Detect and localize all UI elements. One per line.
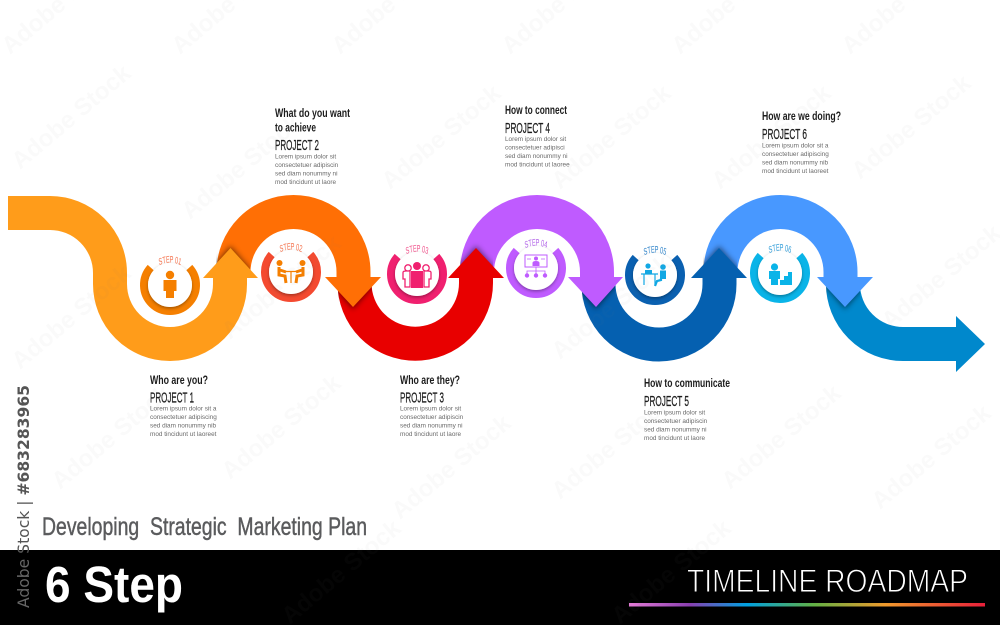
subtitle: Developing Strategic Marketing Plan — [42, 513, 367, 541]
text block: project 6: consectetuer adipiscing — [762, 151, 829, 158]
step 02 badge — [261, 242, 321, 302]
faint watermarks: Adobe Stock — [867, 399, 997, 515]
step 05 badge: STEP 05 — [644, 246, 666, 255]
text block: project 2: PROJECT 2 — [275, 138, 319, 154]
text block: project 6 — [762, 109, 841, 175]
faint watermarks: Adobe Stock — [847, 69, 977, 185]
text block: project 1: Lorem ipsum dolor sit a — [150, 406, 217, 412]
text block: project 6: PROJECT 6 — [762, 127, 807, 143]
text block: project 1: mod tincidunt ut laoreet — [150, 431, 217, 438]
faint watermarks: Adobe Stock — [707, 79, 837, 195]
band: dark blue arc with arrow — [598, 246, 747, 344]
text block: project 5: sed diam nonummy ni — [644, 426, 707, 434]
text block: project 3: Who are they? — [400, 373, 460, 387]
faint watermarks: Adobe Stock — [717, 379, 847, 495]
text block: project 5 — [644, 376, 730, 442]
faint watermarks: Adobe Stock — [377, 79, 507, 195]
band: teal exit arrow — [843, 278, 985, 372]
text block: project 2: What do you want — [275, 106, 350, 120]
icon: group of three — [403, 262, 431, 288]
faint watermarks: Adobe Stock — [217, 369, 347, 485]
band: light blue arc with arrow — [720, 212, 873, 309]
text block: project 2: consectetuer adipiscin — [275, 162, 339, 169]
text block: project 4: consectetuer adipisci — [505, 144, 565, 152]
text block: project 3: Lorem ipsum dolor sit — [400, 406, 461, 412]
text block: project 3: consectetuer adipiscin — [400, 414, 464, 421]
icon: person and stairs — [769, 263, 792, 285]
text block: project 4: How to connect — [505, 103, 567, 117]
title: 6 Step: 6 Step — [45, 556, 183, 613]
icon: two people at a table — [276, 260, 306, 283]
rainbow rule — [629, 603, 985, 606]
text block: project 4: mod tincidunt ut laoree — [505, 162, 570, 168]
icon: two people at a desk — [641, 263, 666, 286]
text block: project 5: Lorem ipsum dolor sit — [644, 410, 705, 416]
text block: project 5: PROJECT 5 — [644, 394, 689, 410]
text block: project 3: PROJECT 3 — [400, 390, 444, 406]
text block: project 2: sed diam nonummy ni — [275, 170, 338, 178]
band: dark orange arc with arrow — [234, 212, 381, 309]
step 06 badge — [750, 244, 810, 303]
faint watermarks: Adobe Stock — [547, 389, 677, 505]
text block: project 3: sed diam nonummy ni — [400, 422, 463, 430]
faint watermarks: Adobe Stock — [217, 229, 347, 345]
step 02 badge: STEP 02 — [280, 242, 302, 252]
icon: presentation screen with tree — [525, 255, 547, 278]
step 01 badge — [140, 256, 200, 315]
title: timeline roadmap: TIMELINE ROADMAP — [687, 563, 968, 599]
faint watermarks: Adobe Stock — [177, 109, 307, 225]
text block: project 2 — [275, 106, 350, 186]
faint watermarks: Adobe Stock — [387, 409, 517, 525]
text block: project 2: mod tincidunt ut laore — [275, 179, 337, 186]
step 05 badge — [625, 246, 685, 305]
footer bar — [0, 550, 1000, 625]
band: red arc with arrow — [354, 246, 504, 344]
band: light orange entry with arrow — [8, 213, 258, 344]
faint watermarks: Adobe Stock — [7, 259, 137, 375]
vertical stock credit: Adobe Stock | #683283965 — [14, 385, 33, 608]
band: purple arc with arrow — [477, 212, 623, 309]
step 04 badge: STEP 04 — [524, 238, 548, 248]
step 06 badge: STEP 06 — [768, 244, 792, 253]
step 01 badge: STEP 01 — [158, 256, 181, 265]
text block: project 2: Lorem ipsum dolor sit — [275, 154, 336, 160]
text block: project 1 — [150, 373, 217, 438]
text block: project 1: sed diam nonummy nib — [150, 422, 217, 430]
faint watermarks: Adobe Stock — [47, 379, 177, 495]
text block: project 5: consectetuer adipiscin — [644, 418, 708, 425]
text block: project 4 — [505, 103, 570, 168]
text block: project 2: to achieve — [275, 120, 316, 134]
text block: project 1: consectetuer adipiscing — [150, 414, 217, 421]
faint watermarks: Adobe Stock — [547, 79, 677, 195]
faint watermarks: Adobe Stock — [7, 59, 137, 175]
faint watermarks: Adobe Stock — [547, 249, 677, 365]
text block: project 1: PROJECT 1 — [150, 390, 194, 406]
step 04 badge — [506, 238, 566, 298]
text block: project 1: Who are you? — [150, 373, 208, 387]
step 03 badge — [387, 244, 447, 304]
text block: project 3: mod tincidunt ut laore — [400, 431, 462, 438]
text block: project 4: sed diam nonummy ni — [505, 153, 568, 160]
text block: project 4: Lorem ipsum dolor sit — [505, 136, 566, 143]
step 03 badge: STEP 03 — [406, 244, 428, 254]
text block: project 4: PROJECT 4 — [505, 121, 550, 137]
text block: project 5: mod tincidunt ut laore — [644, 435, 706, 442]
text block: project 3 — [400, 373, 464, 438]
text block: project 6: Lorem ipsum dolor sit a — [762, 142, 829, 150]
text block: project 6: How are we doing? — [762, 109, 841, 123]
text block: project 6: mod tincidunt ut laoreet — [762, 168, 829, 175]
text block: project 6: sed diam nonummy nib — [762, 160, 829, 166]
icon: person — [164, 271, 176, 298]
text block: project 5: How to communicate — [644, 376, 730, 390]
